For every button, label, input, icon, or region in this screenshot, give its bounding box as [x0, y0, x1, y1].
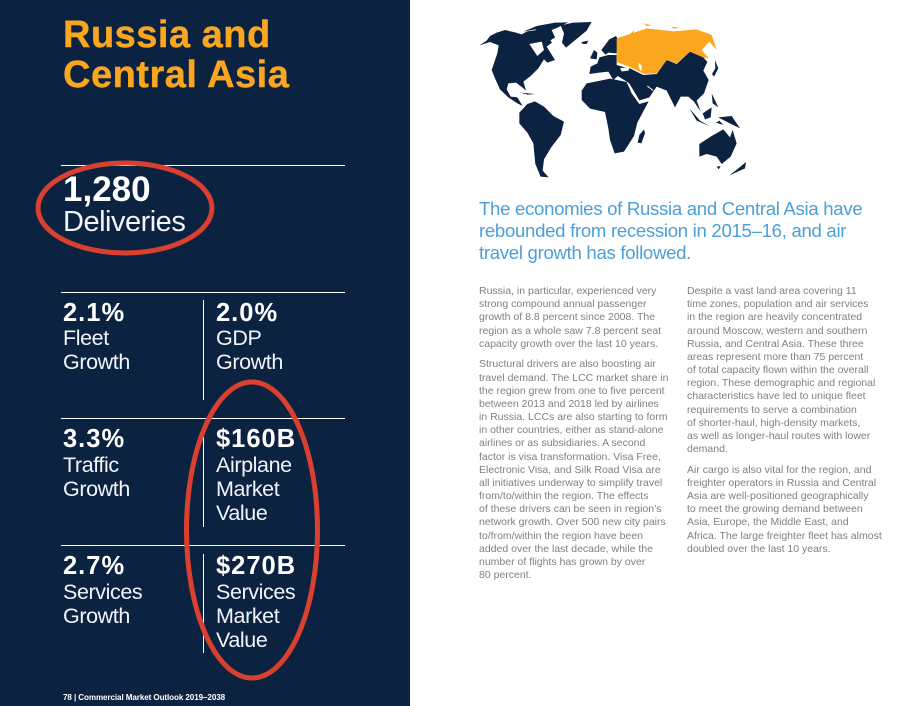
stat: fleet growth: 2.1%	[63, 299, 125, 327]
stat: services market value: Market	[216, 604, 279, 628]
Asia south	[617, 52, 709, 112]
annotation: red ellipse around market values	[184, 380, 320, 680]
text column 1: between 2013 and 2018 led by airlines	[479, 398, 659, 410]
stat: GDP growth	[216, 299, 283, 374]
stat: services market value: Services	[216, 580, 295, 604]
title: Central Asia	[63, 54, 289, 96]
Caribbean	[520, 93, 535, 95]
stat: services growth	[63, 552, 142, 628]
text column 1: 80 percent.	[479, 569, 532, 581]
text column 1: to/from/within the region have been	[479, 530, 643, 542]
title	[63, 14, 290, 96]
Australia	[699, 129, 737, 164]
text column 2: characteristics have led to unique fleet	[687, 390, 866, 402]
text column 1: Structural drivers are also boosting air	[479, 358, 656, 370]
stat: services market value: $270B	[216, 552, 296, 580]
text column 2: of shorter-haul, high-density markets,	[687, 417, 860, 429]
text column 1: network growth. Over 500 new city pairs	[479, 516, 666, 528]
stat: traffic growth: Growth	[63, 477, 130, 501]
Red Sea and Persian Gulf	[629, 83, 653, 101]
stat: GDP growth: 2.0%	[216, 299, 278, 327]
stat: traffic growth	[63, 425, 130, 501]
text column 2: of total capacity flown within the overall	[687, 364, 869, 376]
Europe	[589, 55, 630, 80]
text column 2: areas represent more than 75 percent	[687, 351, 863, 363]
Southeast Asia islands	[689, 93, 740, 128]
text column 2: region. These demographic and regional	[687, 377, 875, 389]
stat: GDP growth: Growth	[216, 350, 283, 374]
stat: airplane market value: Value	[216, 501, 267, 525]
text column 1: region as a whole saw 7.8 percent seat	[479, 325, 661, 337]
world map with Russia and Central Asia highlighted	[480, 22, 746, 178]
UK	[590, 50, 597, 59]
text column 2: Despite a vast land area covering 11	[687, 285, 857, 297]
text column 1: added over the last decade, while the	[479, 543, 653, 555]
text column 1: capacity growth over the last 10 years.	[479, 338, 658, 350]
Hudson Bay	[529, 42, 544, 56]
Caspian Sea	[639, 63, 642, 71]
Russia and Central Asia region	[617, 28, 717, 74]
text column 2: doubled over the last 10 years.	[687, 543, 831, 555]
text column 1: of these drivers can be seen in region’s	[479, 503, 662, 515]
stat: fleet growth: Growth	[63, 350, 130, 374]
stat: services market value: Value	[216, 628, 267, 652]
text column 1: from/to/within the region. The effects	[479, 490, 648, 502]
stat: traffic growth: Traffic	[63, 453, 119, 477]
stat: services growth: 2.7%	[63, 552, 125, 580]
Scandinavia	[601, 36, 618, 55]
headline: travel growth has followed.	[479, 242, 691, 263]
title: Russia and	[63, 14, 271, 56]
stat: deliveries: 1,280	[63, 170, 151, 209]
Iceland	[581, 41, 588, 44]
text column 1: airlines or as subsidiaries. A second	[479, 437, 645, 449]
Japan	[712, 60, 718, 77]
New Zealand and Tasmania	[717, 162, 746, 175]
text column 2: Africa. The large freighter fleet has almost	[687, 530, 882, 542]
text column 2: as well as longer-haul routes with lower	[687, 430, 870, 442]
stat: airplane market value	[216, 425, 296, 525]
text column 1: travel demand. The LCC market share in	[479, 372, 668, 384]
South America	[519, 101, 564, 177]
stat: deliveries	[63, 170, 185, 238]
text column 2: Russia, and Central Asia. These three	[687, 338, 864, 350]
North America	[479, 30, 555, 106]
text column 1: Russia, in particular, experienced very	[479, 285, 656, 297]
headline	[479, 198, 862, 263]
stat: traffic growth: 3.3%	[63, 425, 125, 453]
stat: fleet growth: Fleet	[63, 326, 109, 350]
text column 2: Air cargo is also vital for the region, and	[687, 464, 871, 476]
text column 2: Asia, Europe, the Middle East, and	[687, 516, 849, 528]
footer page reference: 78 | Commercial Market Outlook 2019–2038	[63, 693, 225, 702]
headline: The economies of Russia and Central Asia have	[479, 198, 862, 219]
text column 2: to meet the growing demand between	[687, 503, 863, 515]
text column 1: Electronic Visa, and Silk Road Visa are	[479, 464, 661, 476]
text column 2: Asia are well-positioned geographically	[687, 490, 869, 502]
text column 2: around Moscow, western and southern	[687, 325, 867, 337]
stat: services growth: Growth	[63, 604, 130, 628]
Greenland	[561, 22, 592, 48]
text column 2	[687, 285, 882, 555]
text column 1: all initiatives underway to simplify travel	[479, 477, 662, 489]
Arctic islands	[523, 22, 568, 41]
text column 2: time zones, population and air services	[687, 298, 869, 310]
stat: airplane market value: Airplane	[216, 453, 292, 477]
stat: deliveries: Deliveries	[63, 206, 185, 238]
stat: GDP growth: GDP	[216, 326, 261, 350]
text column 2: requirements to serve a combination	[687, 404, 857, 416]
Black Sea	[620, 67, 629, 71]
annotation: red circle around deliveries	[36, 160, 214, 256]
text column 1: growth of 8.8 percent since 2008. The	[479, 311, 655, 323]
text column 2: demand.	[687, 443, 728, 455]
text column 2: in the region are heavily concentrated	[687, 311, 862, 323]
stat: services market value	[216, 552, 296, 652]
headline: rebounded from recession in 2015–16, and air	[479, 220, 846, 241]
stat: airplane market value: $160B	[216, 425, 296, 453]
stat: services growth: Services	[63, 580, 142, 604]
Madagascar	[638, 129, 645, 143]
text column 1	[479, 285, 668, 581]
text column 1: the region grew from one to five percent	[479, 385, 665, 397]
Africa	[582, 79, 649, 153]
text column 1: in Russia. LCCs are also starting to form	[479, 411, 668, 423]
panel: dark stats sidebar	[0, 0, 410, 706]
stat: airplane market value: Market	[216, 477, 279, 501]
Arctic islands of Russia	[630, 23, 680, 35]
text column 1: strong compound annual passenger	[479, 298, 647, 310]
text column 1: factor is visa transformation. Visa Free,	[479, 451, 661, 463]
text column 1: number of flights has grown by over	[479, 556, 645, 568]
stat: fleet growth	[63, 299, 130, 374]
text column 1: in other countries, either as stand-alone	[479, 424, 663, 436]
text column 2: freighter operators in Russia and Central	[687, 477, 876, 489]
